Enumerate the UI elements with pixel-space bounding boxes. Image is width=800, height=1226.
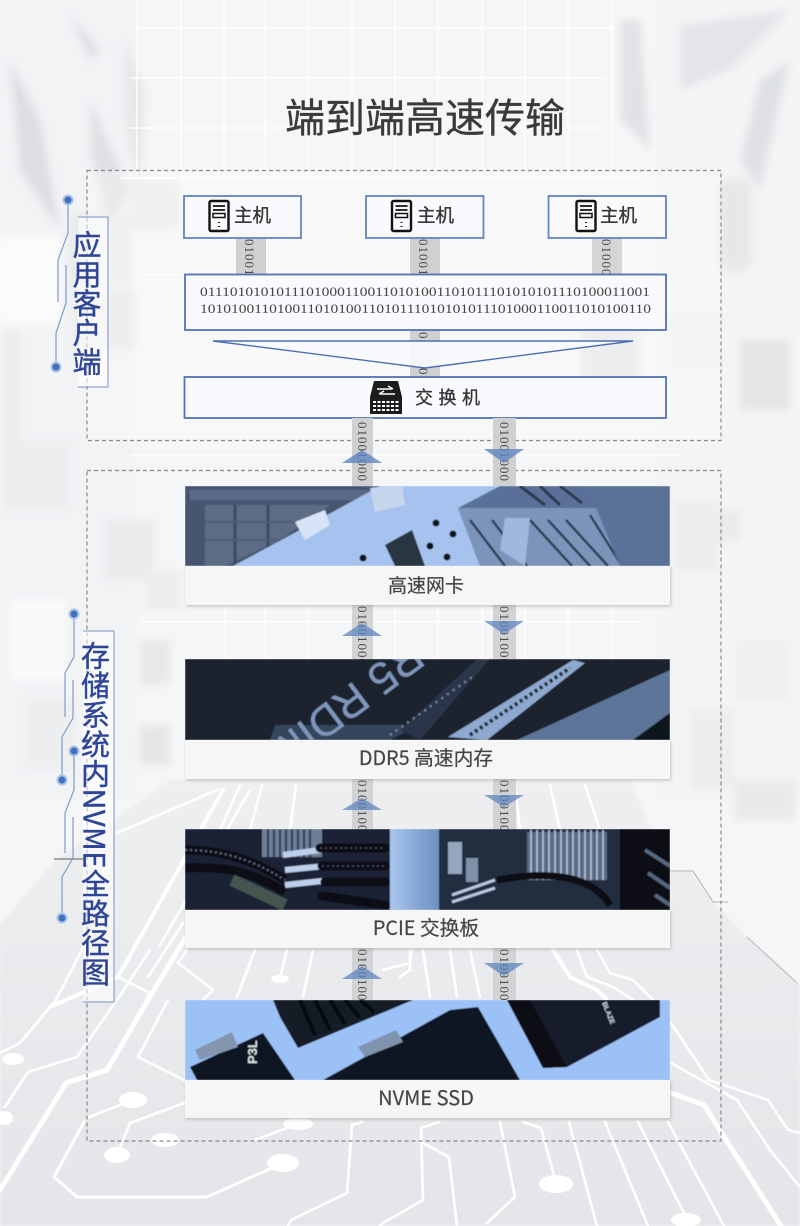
data strips: switch to network card <box>352 418 516 486</box>
icon: server <box>576 201 596 231</box>
arrow: down, memory and PCIE <box>484 795 524 807</box>
panel: application client dashed frame <box>87 170 721 440</box>
card: high-speed network card <box>185 484 670 605</box>
icon: server <box>392 201 411 231</box>
side label: storage NVME path: 存储系统内NVME全路径图 <box>74 641 116 987</box>
data strip: bus to switch: 0 <box>416 332 431 340</box>
data strip: host 2 to bus <box>410 238 440 276</box>
panel: storage system dashed frame <box>87 470 721 1141</box>
switch box <box>184 377 666 418</box>
binary data bus: 10101001101001101010011010111010101011101000110011010100110 <box>200 301 651 316</box>
data strip: host 1 to bus: 01001 <box>242 239 257 276</box>
arrow: down, network card and memory <box>484 621 524 634</box>
card: high-speed network card: 高速网卡 <box>388 571 464 598</box>
arrow: down, switch and network card <box>484 449 524 463</box>
card: DDR5 memory <box>184 659 672 782</box>
icon: server <box>210 201 228 231</box>
host box 1: 主机 <box>234 202 272 228</box>
data strip: bus to switch: 0 <box>416 368 431 376</box>
photo: DDR5 memory <box>185 659 670 740</box>
data strips: PCIE to SSD <box>352 948 516 1009</box>
side label: application client <box>52 196 108 387</box>
binary data bus <box>185 274 666 330</box>
card: NVME SSD <box>185 1000 670 1118</box>
arrow: up, switch and network card <box>342 450 382 463</box>
data strips: PCIE to SSD: 01001000 <box>355 949 370 1009</box>
side label: application client: 应用客户端 <box>66 230 108 376</box>
data strip: bus to switch <box>410 330 440 377</box>
data strips: switch to network card: 01001000 <box>355 422 370 482</box>
converging triangle connector <box>213 341 633 368</box>
data strip: host 3 to bus <box>592 238 622 276</box>
card: NVME SSD: NVME SSD <box>378 1082 474 1111</box>
arrow: down, PCIE and SSD <box>484 963 524 976</box>
data strips: switch to network card: 01001000 <box>497 422 512 482</box>
data strips: network card to memory <box>352 605 516 666</box>
photo: DDR5 memory: R5 RDIM <box>259 631 432 779</box>
title: 端到端高速传输 <box>285 86 565 144</box>
arrow: up, network card and memory <box>342 623 382 636</box>
host box 3: 主机 <box>600 202 638 228</box>
data strip: host 3 to bus: 01000 <box>599 239 614 276</box>
arrow: up, memory and PCIE <box>342 798 382 810</box>
host box 1 <box>184 196 301 238</box>
data strips: PCIE to SSD: 01001000 <box>497 949 512 1009</box>
data strips: network card to memory: 01001000 <box>497 606 512 666</box>
photo: NVME SSD <box>185 1000 670 1080</box>
binary data bus: 01110101010111010001100110101001101011101010101110100011001 <box>200 284 650 299</box>
card: DDR5 memory: DDR5 高速内存 <box>359 742 493 771</box>
data strip: host 1 to bus <box>236 238 266 276</box>
side label: storage NVME path <box>54 610 116 1002</box>
data strips: memory to PCIE: 01001000 <box>355 780 370 840</box>
host box 2 <box>366 196 484 238</box>
photo: NVME SSD: BLAZE <box>600 1001 615 1026</box>
card: PCIE switch board <box>185 829 670 948</box>
data strip: host 2 to bus: 01001 <box>416 239 431 276</box>
card: PCIE switch board: PCIE 交换板 <box>373 912 479 941</box>
host box 3 <box>548 196 666 238</box>
circuit decoration with dots <box>54 610 85 922</box>
data strips: memory to PCIE: 01001000 <box>497 780 512 840</box>
arrow: up, PCIE and SSD <box>342 966 382 979</box>
switch box: 交换机 <box>415 384 486 410</box>
photo: network card <box>185 484 670 566</box>
photo: NVME SSD: P3L <box>245 1040 260 1064</box>
photo: PCIE switch board <box>185 829 670 910</box>
host box 2: 主机 <box>417 202 455 228</box>
data strips: memory to PCIE <box>352 779 516 840</box>
circuit decoration with dots <box>52 196 72 372</box>
data strips: network card to memory: 01001000 <box>355 606 370 666</box>
icon: network switch <box>370 381 402 414</box>
